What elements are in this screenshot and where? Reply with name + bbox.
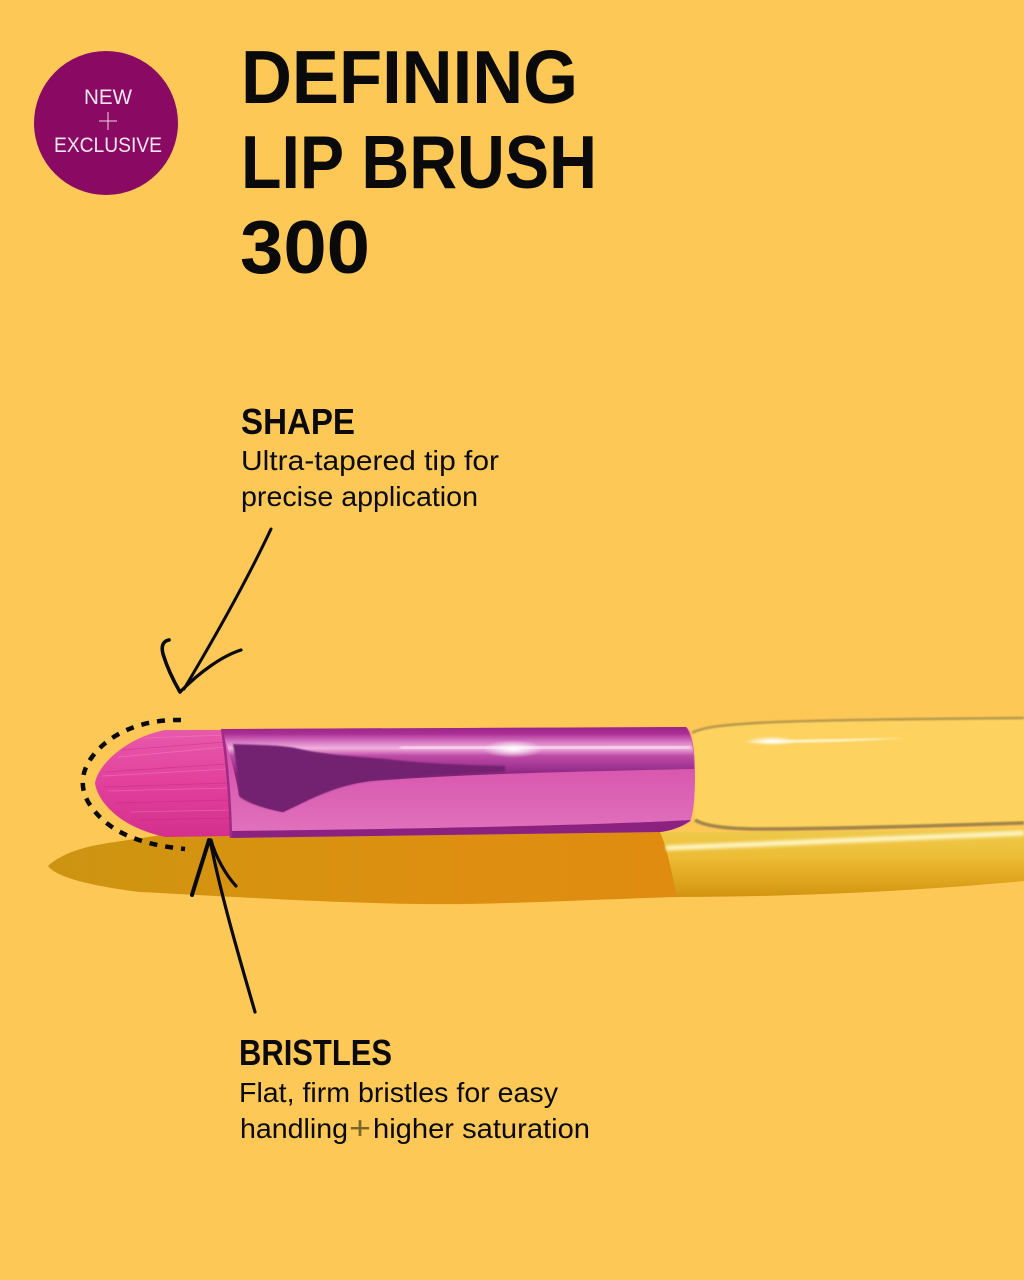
text block: bristles: Flat, firm bristles for easy [239,1077,558,1108]
arrow: bristles [192,840,255,1012]
ferrule [222,727,695,838]
handle reflection [660,828,1024,897]
badge: new + exclusive: NEW [84,86,132,109]
text block: bristles: + [349,1110,371,1146]
text block: shape: SHAPE [241,401,355,442]
clear handle [692,718,1024,829]
bristles [95,730,232,837]
arrow: shape [162,529,271,692]
badge: new + exclusive: EXCLUSIVE [54,134,162,157]
cast shadow [48,826,678,904]
title: LIP BRUSH [241,120,597,204]
text block: bristles [239,1032,590,1146]
text block: shape: precise application [241,481,478,512]
title: DEFINING [241,35,578,119]
text block: bristles: BRISTLES [239,1032,392,1073]
badge: new + exclusive [34,51,178,195]
title [240,35,597,289]
dashed outline around bristle tip [83,720,185,849]
text block: shape: Ultra-tapered tip for [241,445,499,476]
title: 300 [240,205,370,289]
text block: shape [241,401,499,512]
text block: bristles: handling [240,1113,348,1144]
text block: bristles: higher saturation [373,1113,590,1144]
